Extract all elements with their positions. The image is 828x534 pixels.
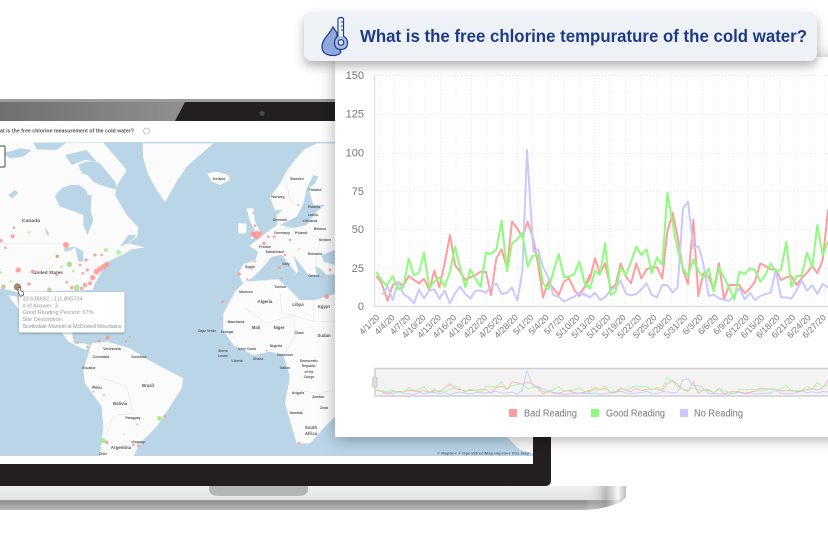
map labels: Chad [294,331,304,335]
x axis date labels: 5/22/20 [615,312,643,340]
map labels: Morocco [239,290,253,294]
x axis date labels: 4/22/20 [461,312,489,340]
y axis labels: 125 [346,108,364,120]
laptop hinge notch [209,486,308,496]
navigator handle [372,377,377,387]
question header bar [304,12,817,61]
map labels: Colombia [93,355,110,359]
chart panel [335,57,828,437]
x axis date labels: 5/16/20 [585,312,612,340]
legend [509,408,743,420]
map labels: Mali [252,325,260,330]
land: North America and Greenland [0,142,213,292]
x axis date labels: 5/19/20 [600,312,628,340]
map labels: Lithuania [303,219,318,223]
map labels: Angola [292,391,305,395]
map labels: Ivory Coast [238,347,257,351]
good reading line [377,193,828,299]
zoom control [0,146,5,167]
x axis date labels: 4/25/20 [477,312,505,340]
map labels: Sweden [290,177,304,181]
map labels: Ukraine [319,238,331,242]
map labels: Democratic [300,359,318,363]
map labels: France [259,245,271,249]
map labels: Canada [22,218,40,224]
map labels: Iceland [213,177,225,181]
map labels: Republic [302,364,316,368]
map labels: Germany [274,231,291,235]
y axis labels: 150 [346,70,364,82]
map labels: Greece [308,274,320,278]
legend: good reading: Good Reading [606,408,665,420]
map labels: Zimb [320,406,328,410]
map labels: Switzerland [266,250,284,254]
map labels: Sierra [218,349,228,353]
map labels: Cameroon [277,353,293,357]
x axis date labels: 6/24/20 [785,312,813,340]
x axis date labels: 6/9/20 [711,312,736,337]
laptop bezel [0,100,551,486]
x axis date labels: 6/27/20 [800,312,828,340]
map tooltip: 33.638692, -111.895704 [22,296,83,302]
map labels: Liberia [232,359,243,363]
x axis date labels: 5/10/20 [554,312,582,340]
x axis date labels: 6/18/20 [754,312,782,340]
legend: bad reading: Bad Reading [524,408,577,420]
x axis date labels: 4/28/20 [492,312,520,340]
x axis date labels: 6/21/20 [769,312,797,340]
x axis date labels: 4/4/20 [372,312,397,337]
x axis date labels: 5/13/20 [569,312,597,340]
map labels: Ghana [253,357,263,361]
map tooltip: Scottsdale Marriott at McDowell Mountains [22,324,122,330]
map labels: Zambia [312,395,324,399]
map labels: Algeria [258,299,273,304]
map labels: Chile [99,452,107,456]
map labels: Paraguay [125,416,141,420]
map tooltip: # of Answer: 3 [22,304,58,310]
y axis labels: 0 [358,301,364,313]
x axis date labels: 4/1/20 [357,312,381,337]
icon: water drop thermometer [322,18,348,56]
map labels: Ecuador [82,366,96,370]
map labels: Romania [308,252,322,256]
y axis labels: 50 [352,224,364,236]
x axis date labels: 6/3/20 [680,312,705,337]
x axis date labels: 6/15/20 [739,312,766,340]
map labels: Denmark [273,218,287,222]
y axis labels: 25 [352,263,364,275]
map labels: Estonia [308,205,320,209]
map labels: Italy [282,262,291,266]
x axis date labels: 4/19/20 [446,312,474,340]
map tooltip: Site Description: [22,317,64,323]
land: Africa and South America [8,279,533,457]
map labels: Egypt [318,304,331,309]
x axis date labels: 6/12/20 [723,312,751,340]
map labels: Gabon [280,366,290,370]
chart grid [374,75,828,306]
map labels: Tunisia [274,285,286,289]
y axis labels [346,70,364,313]
map labels: Bolivia [113,401,128,406]
survey markers south [73,336,300,447]
map labels: Brazil [142,383,154,388]
bezel top edge [0,99,335,102]
bezel reflection [0,102,185,121]
map labels: Congo [304,375,314,379]
x axis date labels: 4/13/20 [415,312,443,340]
x axis date labels: 5/4/20 [526,312,551,337]
map labels: Spain [245,265,255,269]
survey markers north [0,204,331,303]
laptop base [0,486,626,510]
camera [260,111,264,116]
x axis date labels: 5/25/20 [631,312,659,340]
map labels: Venezuela [103,347,122,351]
map labels: Peru [92,385,102,390]
laptop [0,99,626,510]
x axis date labels [357,312,828,340]
map labels: Argentina [111,445,132,450]
x axis date labels: 6/6/20 [696,312,720,337]
map labels: United States [33,270,63,275]
line chart: readings [377,150,828,303]
map header title: at is the free chlorine measurement of the cold water? [0,128,134,134]
map labels: South [305,425,317,430]
no reading line [383,150,828,303]
range navigator [372,368,828,396]
map labels: Cape Verde [198,329,216,333]
map tooltip [19,292,124,332]
map labels: Senegal [221,330,233,334]
map labels: Africa [305,431,318,436]
map labels: Nigeria [270,344,283,348]
map labels: Latvia [308,213,318,217]
info icon [144,128,150,134]
x axis date labels: 4/16/20 [431,312,458,340]
x axis date labels: 4/10/20 [400,312,428,340]
map labels: Namibia [290,411,303,415]
bad reading line [377,211,828,301]
x axis date labels: 5/1/20 [511,312,535,337]
map labels: Norway [271,195,286,199]
x axis date labels: 5/28/20 [646,312,674,340]
map labels: Niger [273,325,285,330]
navigator mini lines [377,371,828,395]
map labels: Suriname [131,355,147,359]
map labels: Mauritania [228,320,244,324]
map labels: of the [304,370,314,374]
x axis date labels: 5/31/20 [662,312,689,340]
screen [0,121,533,464]
map labels: Leone [218,354,228,358]
land: Europe [207,143,335,283]
map tooltip: Good Reading Percent: 67% [22,310,94,316]
x axis date labels: 5/7/20 [542,312,566,337]
cursor icon [18,288,24,296]
y axis labels: 75 [352,186,364,198]
map labels: Finland [309,188,321,192]
map labels [22,177,331,456]
x axis date labels: 4/7/20 [388,312,412,337]
question heading: What is the free chlorine tempurature of the cold water? [360,26,807,46]
chart axes [374,75,828,306]
map attribution: © Mapbox © OpenStreetMap Improve this map [437,450,530,456]
selected marker [14,284,21,290]
map labels: Poland [295,231,307,235]
world map [0,142,533,457]
map labels: Sudan [317,333,331,338]
map labels: Belarus [314,227,326,231]
map labels: Libya [292,302,304,307]
legend: no reading: No Reading [694,408,743,420]
map labels: Uruguay [131,440,145,444]
y axis labels: 100 [346,148,364,160]
